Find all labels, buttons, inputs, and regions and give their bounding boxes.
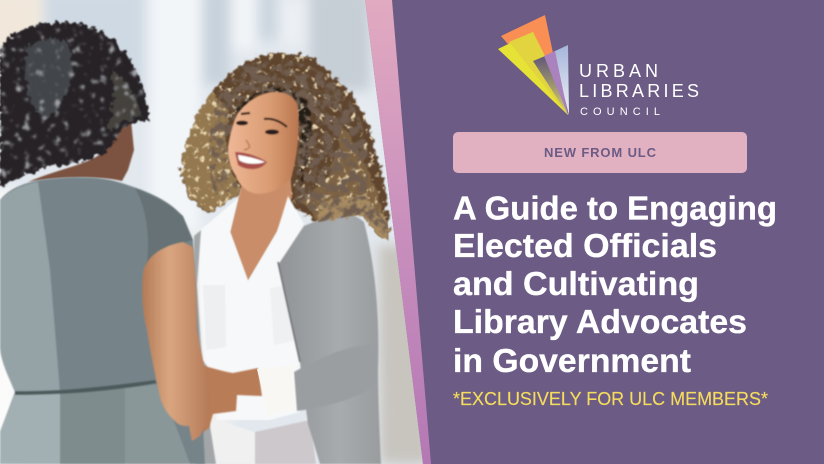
- right woman: shirt cuff: [257, 368, 296, 402]
- diagonal pink stripe: [365, 0, 431, 464]
- badge: new from ULC: [453, 132, 747, 173]
- left woman: dress: [0, 177, 205, 464]
- right woman: trousers: [227, 420, 316, 464]
- title: in Government: [453, 342, 691, 379]
- blurred office background: [0, 0, 430, 464]
- right woman: grey cardigan: [192, 213, 381, 464]
- logo wordmark: URBAN: [579, 61, 658, 81]
- right woman: white shirt: [198, 196, 304, 420]
- logo wordmark: LIBRARIES: [579, 81, 699, 101]
- title: [453, 190, 777, 379]
- title: A Guide to Engaging: [453, 190, 777, 226]
- ULC logo: [498, 15, 699, 118]
- title: and Cultivating: [453, 265, 699, 302]
- logo icon: fanned colour shards: [498, 15, 569, 115]
- title: Elected Officials: [453, 227, 717, 264]
- logo wordmark: COUNCIL: [580, 106, 660, 118]
- right woman: hair: [180, 52, 388, 240]
- right woman: hair over shoulder: [318, 196, 388, 240]
- right woman: forearm and hand: [202, 365, 263, 433]
- left woman: neck and face: [28, 118, 134, 182]
- members-only note: *EXCLUSIVELY FOR ULC MEMBERS*: [453, 389, 768, 409]
- left woman: arm and hand: [142, 242, 210, 441]
- logo wordmark: [579, 61, 699, 118]
- badge: new from ULC: NEW FROM ULC: [544, 145, 657, 160]
- right woman: neck and chest: [230, 170, 292, 281]
- right woman: [180, 52, 388, 464]
- title: Library Advocates: [453, 303, 747, 340]
- left woman: hair: [0, 22, 148, 188]
- photo: two women shaking hands: [0, 0, 430, 464]
- left woman: [0, 22, 210, 464]
- right woman: face: [228, 92, 299, 194]
